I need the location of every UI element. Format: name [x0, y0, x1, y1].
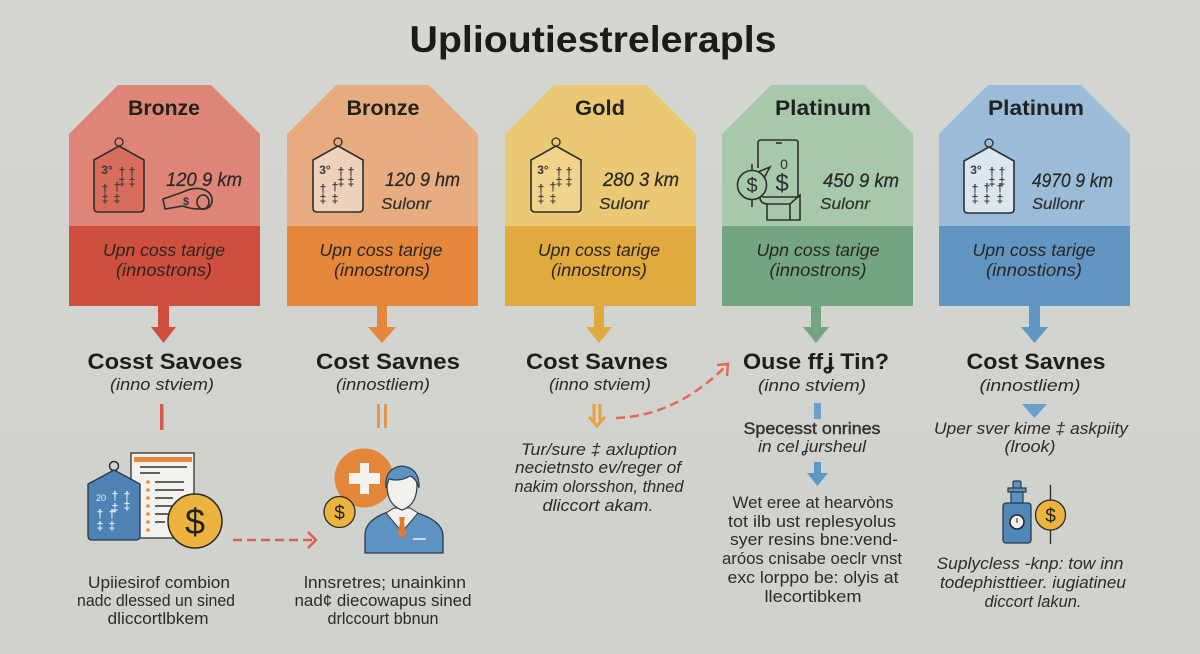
- blue connector: [814, 403, 821, 419]
- icon: price tag gold: †: [538, 182, 544, 196]
- panel: platinum green: [722, 85, 913, 306]
- label: Sulonr: [599, 196, 650, 213]
- column 2 subheading: (innostliem): [336, 376, 430, 394]
- icon: price tag blue: ‡: [989, 175, 995, 189]
- arrow: gold down: [586, 306, 612, 343]
- icon: price tag blue: 3°: [970, 163, 982, 177]
- tier heading: gold: Gold: [575, 97, 625, 120]
- icon: tag, document and coin: †: [109, 507, 115, 521]
- column 2 text: lnnsretres; unainkinn: [304, 574, 466, 592]
- icon: person with plus badge: [324, 448, 443, 553]
- arrow: dashed red right: [233, 532, 316, 548]
- description: (innostrons): [116, 260, 212, 280]
- orange connector: [377, 404, 387, 428]
- column 2 heading: Cost Savnes: [316, 349, 460, 374]
- description: (innostrons): [334, 260, 430, 280]
- icon: price tag blue: ‡: [984, 192, 990, 206]
- icon: phone and coin: $: [746, 175, 758, 197]
- icon: price tag orange: ‡: [332, 192, 338, 206]
- distance value: 4970 9 km: [1032, 171, 1113, 192]
- description: Upn coss tarige: [320, 240, 443, 260]
- icon: bottle and coin: $: [1045, 506, 1056, 527]
- icon: price tag red: 3°: [101, 163, 113, 177]
- tier heading: bronze orange: Bronze: [346, 97, 420, 120]
- icon: price tag gold: †: [550, 180, 556, 194]
- description: (innostions): [986, 260, 1082, 280]
- distance value: 120 9 km: [166, 170, 242, 191]
- label: Sulonr: [381, 196, 432, 213]
- arrow: blue down: [807, 462, 828, 486]
- column 2 text: drlccourt bbnun: [328, 610, 438, 628]
- icon: price tag gold: [531, 138, 581, 212]
- tier heading: platinum blue: Platinum: [988, 97, 1084, 120]
- column 5 note: Uper sver kime ‡ askpiity: [934, 420, 1130, 438]
- icon: tag, document and coin: ‡: [109, 519, 115, 533]
- column 4 note: in cel ʝursheul: [758, 438, 867, 456]
- icon: price tag gold: 3°: [537, 163, 549, 177]
- column 5 text: diccort lakun.: [984, 593, 1082, 611]
- icon: price tag blue: †: [997, 181, 1003, 195]
- icon: price tag red: ‡: [119, 175, 125, 189]
- distance value: 120 9 hm: [385, 170, 460, 191]
- arrow: blue down: [1021, 306, 1048, 343]
- column 4 subheading: (inno stviem): [758, 377, 866, 395]
- icon: tag, document and coin: ‡: [124, 499, 130, 513]
- icon: price tag orange: ‡: [338, 175, 344, 189]
- icon: price tag orange: ‡: [348, 175, 354, 189]
- column 1 text: dliccortlbkem: [108, 610, 208, 628]
- column 4 note: [744, 420, 880, 456]
- column 4 text: aróos cnisabe oeclr vnst: [722, 550, 902, 568]
- column 2 text: nad¢ diecowapus sined: [294, 592, 472, 610]
- column 1 subheading: (inno stviem): [110, 376, 214, 394]
- column 3 subheading: (inno stviem): [549, 376, 651, 394]
- icon: price tag red: †: [129, 165, 135, 179]
- icon: phone and coin: 0: [780, 156, 788, 172]
- icon: bottle and coin: [1003, 481, 1066, 544]
- icon: money bag: [163, 188, 212, 209]
- column 4 heading: Ouse ffʝ Tin?: [743, 349, 889, 374]
- title: Uplioutiestrelerapls: [410, 19, 776, 60]
- icon: price tag red: ‡: [114, 192, 120, 206]
- icon: price tag red: ‡: [102, 192, 108, 206]
- icon: price tag blue: ‡: [972, 192, 978, 206]
- arrow: green down: [803, 306, 829, 343]
- column 4 text: tot ilb ust replesyolus: [728, 513, 896, 531]
- column 3 text: nakim olorsshon, thned: [514, 478, 684, 496]
- arrow: gold double down: [589, 404, 605, 426]
- label: Sullonr: [1032, 196, 1085, 213]
- description: (innostrons): [551, 260, 647, 280]
- icon: tag, document and coin: ‡: [97, 519, 103, 533]
- icon: price tag blue: †: [999, 165, 1005, 179]
- icon: person with plus badge: $: [334, 503, 345, 524]
- arrow: dashed curved red: [616, 364, 728, 418]
- column 1 text: nadc dlessed un sined: [77, 592, 235, 610]
- icon: price tag gold: ‡: [538, 192, 544, 206]
- icon: tag, document and coin: [88, 453, 222, 548]
- column 5 subheading: (innostliem): [980, 377, 1080, 395]
- icon: phone and coin: [738, 140, 800, 220]
- column 5 text: todephisttieer. iugiatineu: [940, 574, 1126, 592]
- arrow: blue triangle: [1022, 404, 1047, 418]
- icon: price tag orange: †: [338, 165, 344, 179]
- panel: bronze red: [69, 85, 260, 306]
- icon: price tag blue: †: [984, 181, 990, 195]
- icon: tag, document and coin: ‡: [112, 501, 118, 515]
- column 5 note: (lrook): [1004, 438, 1056, 456]
- description: Upn coss tarige: [538, 240, 660, 260]
- column 3 text: dliccort akam.: [542, 497, 654, 515]
- red connector: [160, 404, 164, 430]
- column 5 heading: Cost Savnes: [966, 349, 1106, 374]
- icon: price tag red: ‡: [129, 175, 135, 189]
- column 4 text: syer resins bne:vend-: [730, 531, 898, 549]
- icon: price tag blue: ‡: [999, 175, 1005, 189]
- icon: price tag blue: †: [989, 165, 995, 179]
- icon: price tag red: †: [114, 180, 120, 194]
- icon: price tag gold: ‡: [556, 175, 562, 189]
- tier heading: bronze red: Bronze: [128, 97, 200, 120]
- icon: price tag gold: ‡: [550, 192, 556, 206]
- icon: tag, document and coin: †: [97, 507, 103, 521]
- column 4 text: exc lorppo be: olyis at: [728, 569, 899, 587]
- distance value: 280 3 km: [602, 170, 679, 191]
- icon: price tag blue: ‡: [997, 192, 1003, 206]
- icon: price tag red: †: [119, 165, 125, 179]
- column 4 text: Wet eree at hearvòns: [732, 494, 894, 512]
- column 5 text: [936, 555, 1126, 611]
- description: Upn coss tarige: [103, 240, 225, 260]
- panel: bronze orange: [287, 85, 478, 306]
- arrow: orange down: [368, 306, 396, 343]
- icon: tag, document and coin: †: [112, 489, 118, 503]
- icon: price tag orange: 3°: [319, 163, 331, 177]
- icon: price tag orange: ‡: [320, 192, 326, 206]
- icon: money bag: $: [183, 196, 189, 208]
- icon: price tag orange: †: [348, 165, 354, 179]
- distance value: 450 9 km: [823, 171, 899, 192]
- icon: price tag orange: [313, 138, 363, 212]
- icon: tag, document and coin: †: [124, 489, 130, 503]
- icon: price tag red: †: [102, 182, 108, 196]
- column 1 heading: Cosst Savoes: [88, 349, 242, 374]
- column 1 text: Upiiesirof combion: [88, 574, 230, 592]
- icon: price tag gold: ‡: [566, 175, 572, 189]
- description: (innostrons): [770, 260, 866, 280]
- description: Upn coss tarige: [756, 240, 880, 260]
- icon: price tag orange: †: [332, 180, 338, 194]
- panel: platinum blue: [939, 85, 1130, 306]
- column 4 text: llecortibkem: [764, 588, 862, 606]
- icon: price tag blue: †: [972, 182, 978, 196]
- column 3 text: necietnsto ev/reger of: [515, 459, 684, 477]
- icon: tag, document and coin: $: [185, 501, 205, 542]
- icon: phone and coin: $: [775, 170, 789, 197]
- column 4 note: Specesst onrines: [744, 420, 880, 438]
- label: Sulonr: [820, 196, 871, 213]
- arrow: red down: [151, 306, 176, 343]
- panel: gold: [505, 85, 696, 306]
- icon: price tag gold: †: [566, 165, 572, 179]
- column 5 text: Suplycless -knp: tow inn: [936, 555, 1124, 573]
- icon: price tag blue: [964, 139, 1014, 213]
- icon: price tag red: [94, 138, 144, 212]
- tier heading: platinum green: Platinum: [775, 97, 871, 120]
- column 3 text: Tur/sure ‡ axluption: [521, 441, 677, 459]
- icon: price tag orange: †: [320, 182, 326, 196]
- icon: price tag gold: †: [556, 165, 562, 179]
- icon: tag, document and coin: 20: [96, 493, 106, 503]
- column 3 heading: Cost Savnes: [526, 349, 668, 374]
- description: Upn coss tarige: [972, 240, 1096, 260]
